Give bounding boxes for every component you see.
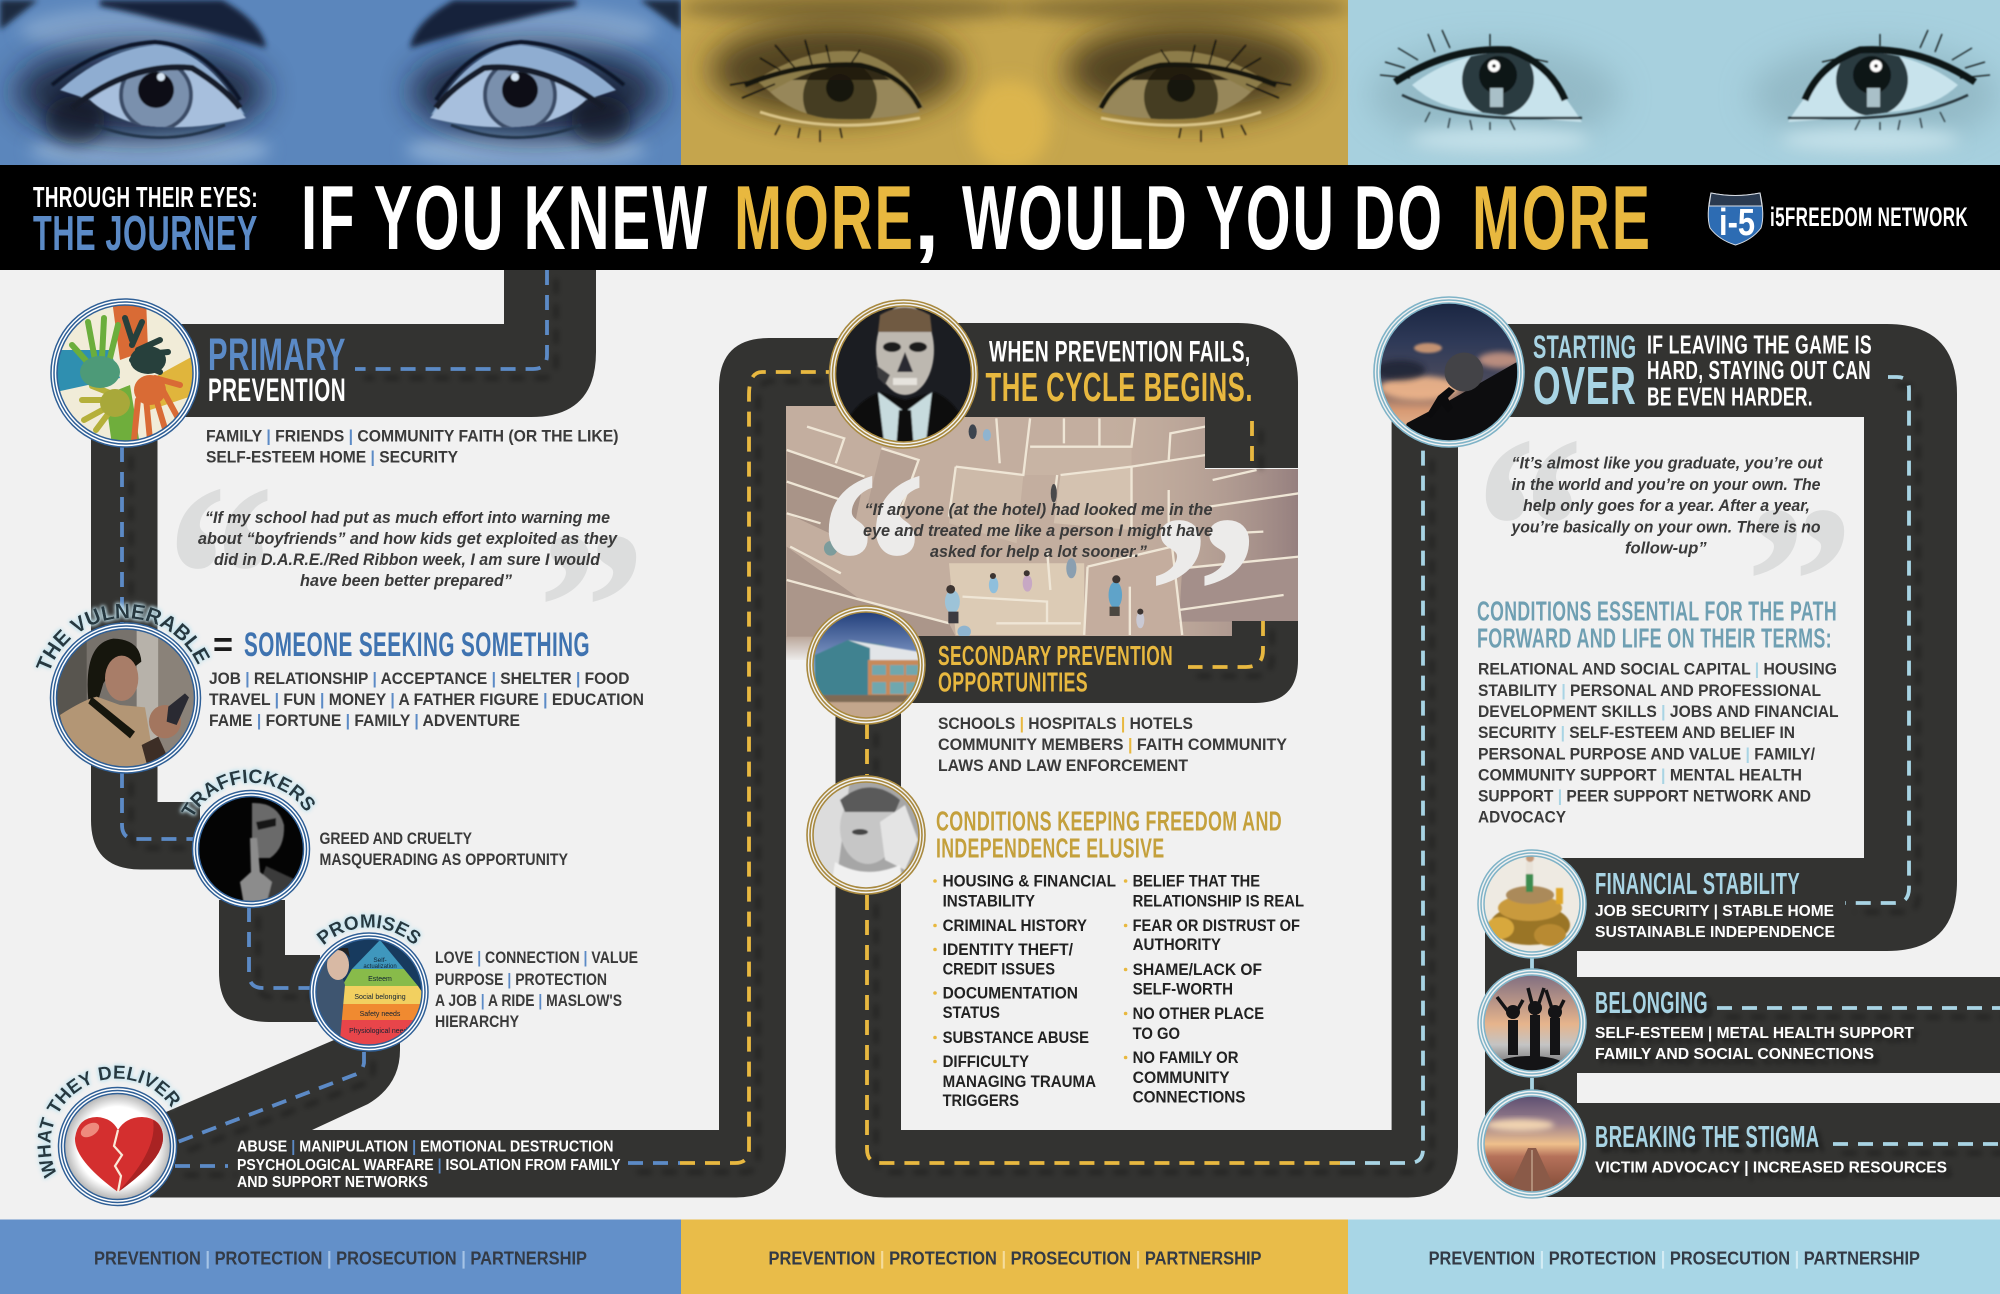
heading: starting over: BE EVEN HARDER.	[1647, 382, 1813, 412]
quote marks: maze	[807, 417, 1253, 713]
main title: MORE	[734, 168, 915, 269]
main title: MORE	[1472, 168, 1652, 269]
quote: school: about “boyfriends” and how kids get exploited as they	[198, 530, 618, 548]
road: primary to traffickers	[91, 417, 200, 870]
lane: blue descending	[120, 447, 124, 625]
circle: promises, Maslow pyramid: Esteem	[368, 976, 392, 983]
text: seeking list	[209, 670, 644, 730]
banner subtitle: THE JOURNEY	[33, 207, 258, 261]
list: conditions left column: TRIGGERS	[943, 1092, 1019, 1110]
road: promises to delivery and up to centre column	[150, 338, 880, 1198]
list: conditions right column: RELATIONSHIP IS REAL	[1133, 892, 1304, 910]
quote marks: maze: ”	[1135, 472, 1253, 713]
text: secondary list: SCHOOLS | HOSPITALS | HOTELS	[938, 715, 1193, 733]
footer band: light blue: PREVENTION | PROTECTION | PROSECUTION | PARTNERSHIP	[1429, 1249, 1920, 1269]
lane: blue to traffickers	[122, 773, 196, 839]
quote: graduate: you’re basically on your own. There is no	[1511, 518, 1820, 536]
list: conditions left column: CREDIT ISSUES	[943, 960, 1055, 978]
text: what they deliver list: ABUSE | MANIPULATION | EMOTIONAL DESTRUCTION	[237, 1138, 614, 1156]
list: conditions left column: CRIMINAL HISTORY	[943, 917, 1087, 935]
quote marks: primary	[155, 430, 640, 729]
quote: school	[198, 509, 618, 590]
list: conditions essential: RELATIONAL AND SOCIAL CAPITAL | HOUSING	[1478, 661, 1837, 679]
lane: blue under text	[628, 1161, 680, 1165]
text: primary prevention list	[206, 428, 618, 466]
list: conditions left column	[933, 872, 1116, 1110]
circle: promises, Maslow pyramid: Self-	[373, 957, 387, 964]
text: promises list: LOVE | CONNECTION | VALUE	[435, 949, 638, 967]
main title: ,	[914, 168, 941, 269]
label: the vulnerable: THE VULNERABLE	[34, 600, 212, 670]
heading: secondary prevention: SECONDARY PREVENTION	[938, 640, 1173, 671]
text: promises list: PURPOSE | PROTECTION	[435, 971, 607, 989]
quote marks: starting over	[1464, 382, 1848, 703]
circle: coins	[1478, 850, 1586, 958]
text: primary prevention list: FAMILY | FRIENDS | COMMUNITY FAITH (OR THE LIKE)	[206, 428, 618, 446]
heading: starting over: IF LEAVING THE GAME IS	[1647, 330, 1872, 360]
list: conditions left column: INSTABILITY	[943, 892, 1035, 910]
text: belonging: FAMILY AND SOCIAL CONNECTIONS	[1595, 1046, 1874, 1063]
lane: stigma	[1833, 1142, 2000, 1146]
list: conditions essential: SECURITY | SELF-ESTEEM AND BELIEF IN	[1478, 724, 1795, 742]
lane: gold left of centre column	[680, 372, 830, 1163]
heading: starting over: STARTING	[1533, 329, 1636, 365]
circle: promises, Maslow pyramid: Physiological needs	[349, 1028, 411, 1035]
heading: conditions keeping freedom: INDEPENDENCE ELUSIVE	[936, 832, 1164, 864]
heading: secondary prevention: OPPORTUNITIES	[938, 667, 1088, 698]
logo: i5 Freedom Network	[1708, 193, 1968, 245]
label: what they deliver: WHAT THEY DELIVER	[36, 1062, 182, 1180]
circle: promises, Maslow pyramid	[310, 930, 434, 1055]
heading: someone seeking something: =	[213, 626, 233, 664]
text: what they deliver list	[237, 1138, 621, 1191]
circle: building	[807, 606, 925, 725]
heading: secondary prevention	[938, 640, 1173, 698]
quote marks: starting over: ”	[1733, 462, 1848, 703]
text: seeking list: TRAVEL | FUN | MONEY | A FATHER FIGURE | EDUCATION	[209, 691, 644, 709]
heading: primary prevention: PREVENTION	[208, 372, 346, 408]
list: conditions right column: CONNECTIONS	[1133, 1088, 1246, 1106]
photo strip: light blue eyes	[1348, 0, 2000, 165]
list: conditions essential	[1478, 661, 1839, 827]
list: conditions left column: MANAGING TRAUMA	[943, 1073, 1096, 1091]
text: financial stability: FINANCIAL STABILITY	[1595, 866, 1800, 901]
quote: hotel: asked for help a lot sooner.”	[930, 543, 1148, 561]
heading: primary prevention: PRIMARY	[208, 329, 346, 380]
list: conditions essential: DEVELOPMENT SKILLS | JOBS AND FINANCIAL	[1478, 703, 1839, 721]
text: promises list	[435, 949, 638, 1031]
text: promises list: A JOB | A RIDE | MASLOW'S	[435, 992, 622, 1010]
banner subtitle	[33, 182, 258, 261]
list: conditions essential: SUPPORT | PEER SUPPORT NETWORK AND	[1478, 788, 1811, 806]
heading: someone seeking something: SOMEONE SEEKING SOMETHING	[244, 626, 590, 664]
footer band: gold: PREVENTION | PROTECTION | PROSECUTION | PARTNERSHIP	[768, 1249, 1262, 1269]
list: conditions left column: HOUSING & FINANCIAL	[943, 872, 1116, 890]
label: promises: PROMISES	[314, 912, 422, 946]
circle: woman in distress	[807, 776, 925, 895]
photo strip: blue eyes	[0, 0, 681, 168]
text: secondary list: COMMUNITY MEMBERS | FAITH COMMUNITY	[938, 736, 1287, 754]
lane: blue from heart	[175, 1164, 228, 1168]
list: conditions right column: FEAR OR DISTRUST OF	[1133, 917, 1300, 935]
list: conditions left column: DIFFICULTY	[943, 1053, 1029, 1071]
main title: WOULD YOU DO	[962, 168, 1444, 269]
text: seeking list: JOB | RELATIONSHIP | ACCEPTANCE | SHELTER | FOOD	[209, 670, 630, 688]
quote marks: maze: “	[807, 417, 922, 710]
lane: blue primary	[355, 270, 547, 369]
heading: someone seeking something	[213, 626, 590, 664]
heading: conditions essential	[1477, 596, 1837, 654]
road: right column	[1440, 324, 2000, 1197]
text: financial stability: JOB SECURITY | STABLE HOME	[1595, 903, 1834, 920]
heading: when prevention fails: WHEN PREVENTION FAILS,	[989, 336, 1251, 369]
list: conditions right column: AUTHORITY	[1133, 936, 1221, 954]
main title: IF YOU KNEW	[301, 168, 709, 269]
lane: blue to promises	[249, 907, 312, 988]
list: conditions left column: SUBSTANCE ABUSE	[943, 1029, 1089, 1047]
circle: promises, Maslow pyramid: Safety needs	[360, 1011, 401, 1018]
road: centre column lower loop	[836, 410, 1458, 1198]
text: what they deliver list: PSYCHOLOGICAL WARFARE | ISOLATION FROM FAMILY	[237, 1157, 621, 1174]
banner band	[0, 165, 2000, 270]
text: breaking the stigma	[1595, 1119, 1947, 1177]
quote: graduate: help only goes for a year. After a year,	[1523, 497, 1810, 515]
heading: primary prevention	[208, 329, 346, 408]
quote marks: starting over: “	[1464, 382, 1579, 675]
list: conditions essential: COMMUNITY SUPPORT | MENTAL HEALTH	[1478, 766, 1802, 784]
quote: graduate: in the world and you’re on your own. The	[1512, 476, 1820, 494]
list: conditions essential: PERSONAL PURPOSE AND VALUE | FAMILY/	[1478, 746, 1815, 764]
list: conditions right column: BELIEF THAT THE	[1133, 872, 1260, 890]
text: breaking the stigma: BREAKING THE STIGMA	[1595, 1119, 1820, 1154]
text: traffickers: GREED AND CRUELTY	[320, 830, 472, 848]
list: conditions right column	[1124, 872, 1304, 1106]
circle: broken heart	[58, 1088, 176, 1206]
text: secondary list	[938, 715, 1287, 775]
text: secondary list: LAWS AND LAW ENFORCEMENT	[938, 757, 1188, 775]
road: left column top	[91, 270, 2000, 1198]
text: seeking list: FAME | FORTUNE | FAMILY | ADVENTURE	[209, 712, 520, 730]
banner subtitle: THROUGH THEIR EYES:	[33, 182, 258, 214]
main title	[301, 168, 1652, 269]
circle: skull-painted man	[830, 300, 980, 450]
list: conditions left column: STATUS	[943, 1004, 1000, 1022]
quote: school: “If my school had put as much effort into warning me	[205, 509, 610, 527]
quote: graduate: follow-up”	[1625, 540, 1707, 558]
text: what they deliver list: AND SUPPORT NETWORKS	[237, 1174, 428, 1191]
circle: boulder at sunset	[1374, 297, 1525, 450]
list: conditions right column: SHAME/LACK OF	[1133, 961, 1262, 979]
quote marks: primary: “	[155, 430, 270, 723]
heading: starting over: OVER	[1533, 356, 1636, 416]
footer band: gold	[681, 1220, 1348, 1294]
list: conditions essential: ADVOCACY	[1478, 809, 1566, 827]
lane: belonging	[1717, 1006, 2000, 1010]
quote: hotel: eye and treated me like a person I might have	[863, 522, 1213, 540]
road: traffickers to promises	[219, 900, 320, 1022]
heading: starting over: HARD, STAYING OUT CAN	[1647, 355, 1871, 385]
quote: school: have been better prepared”	[300, 572, 513, 590]
heading: conditions keeping freedom: CONDITIONS KEEPING FREEDOM AND	[936, 806, 1282, 837]
list: conditions right column: NO FAMILY OR	[1133, 1049, 1239, 1067]
text: primary prevention list: SELF-ESTEEM HOME | SECURITY	[206, 448, 458, 466]
heading: conditions keeping freedom	[936, 806, 1282, 864]
list: conditions right column: TO GO	[1133, 1025, 1180, 1043]
footer band: blue	[0, 1220, 681, 1294]
quote: school: did in D.A.R.E./Red Ribbon week, I am sure I would	[214, 551, 601, 569]
text: breaking the stigma: VICTIM ADVOCACY | INCREASED RESOURCES	[1595, 1160, 1947, 1177]
list: conditions right column: SELF-WORTH	[1133, 980, 1233, 998]
text: traffickers: MASQUERADING AS OPPORTUNITY	[320, 851, 568, 869]
list: conditions right column: NO OTHER PLACE	[1133, 1005, 1264, 1023]
text: traffickers	[320, 830, 568, 869]
circle: traffickers man	[192, 790, 312, 910]
quote marks: primary: ”	[525, 488, 640, 729]
label: traffickers: TRAFFICKERS	[178, 766, 317, 818]
text: belonging	[1595, 985, 1914, 1063]
list: conditions essential: STABILITY | PERSONAL AND PROFESSIONAL	[1478, 682, 1821, 700]
lane: blue diagonal	[175, 1052, 364, 1143]
lane: light blue upper right	[1845, 377, 1909, 903]
text: promises list: HIERARCHY	[435, 1013, 519, 1031]
footer band: blue: PREVENTION | PROTECTION | PROSECUTION | PARTNERSHIP	[94, 1249, 587, 1269]
circle: promises, Maslow pyramid: Social belonging	[354, 994, 406, 1001]
maze photo	[786, 406, 1299, 662]
quote: hotel: “If anyone (at the hotel) had looked me in the	[864, 501, 1212, 519]
heading: when prevention fails	[986, 336, 1253, 410]
circle: the vulnerable woman	[47, 623, 203, 773]
heading: starting over	[1533, 329, 1872, 416]
quote: graduate: “It’s almost like you graduate, you’re out	[1512, 454, 1824, 472]
photo strip: gold eyes	[680, 0, 1350, 170]
circle: primary prevention hands	[51, 298, 199, 447]
circle: desert road	[1478, 1090, 1586, 1200]
text: belonging: SELF-ESTEEM | METAL HEALTH SUPPORT	[1595, 1025, 1914, 1042]
circle: promises, Maslow pyramid: actualization	[363, 964, 397, 970]
lane: gold centre column	[867, 724, 1340, 1163]
heading: when prevention fails: THE CYCLE BEGINS.	[986, 364, 1253, 410]
circle: belonging silhouettes	[1478, 969, 1586, 1077]
lane: light blue up to starting over	[1340, 447, 1423, 1163]
lane dashes	[122, 270, 2000, 1166]
text: belonging: BELONGING	[1595, 985, 1708, 1020]
text: financial stability: SUSTAINABLE INDEPENDENCE	[1595, 924, 1835, 941]
list: conditions right column: COMMUNITY	[1133, 1069, 1230, 1087]
text: financial stability	[1595, 866, 1835, 941]
lane: light blue connectors	[1530, 958, 1534, 1090]
quote: graduate	[1511, 454, 1824, 558]
logo: i5 Freedom Network: i-5	[1719, 202, 1755, 244]
footer band: light blue	[1348, 1220, 2000, 1294]
quote: hotel	[863, 501, 1213, 561]
road: centre column header	[880, 323, 1298, 468]
list: conditions left column: DOCUMENTATION	[943, 984, 1078, 1002]
lane: gold maze sides	[1188, 421, 1263, 667]
list: conditions left column: IDENTITY THEFT/	[943, 941, 1073, 959]
